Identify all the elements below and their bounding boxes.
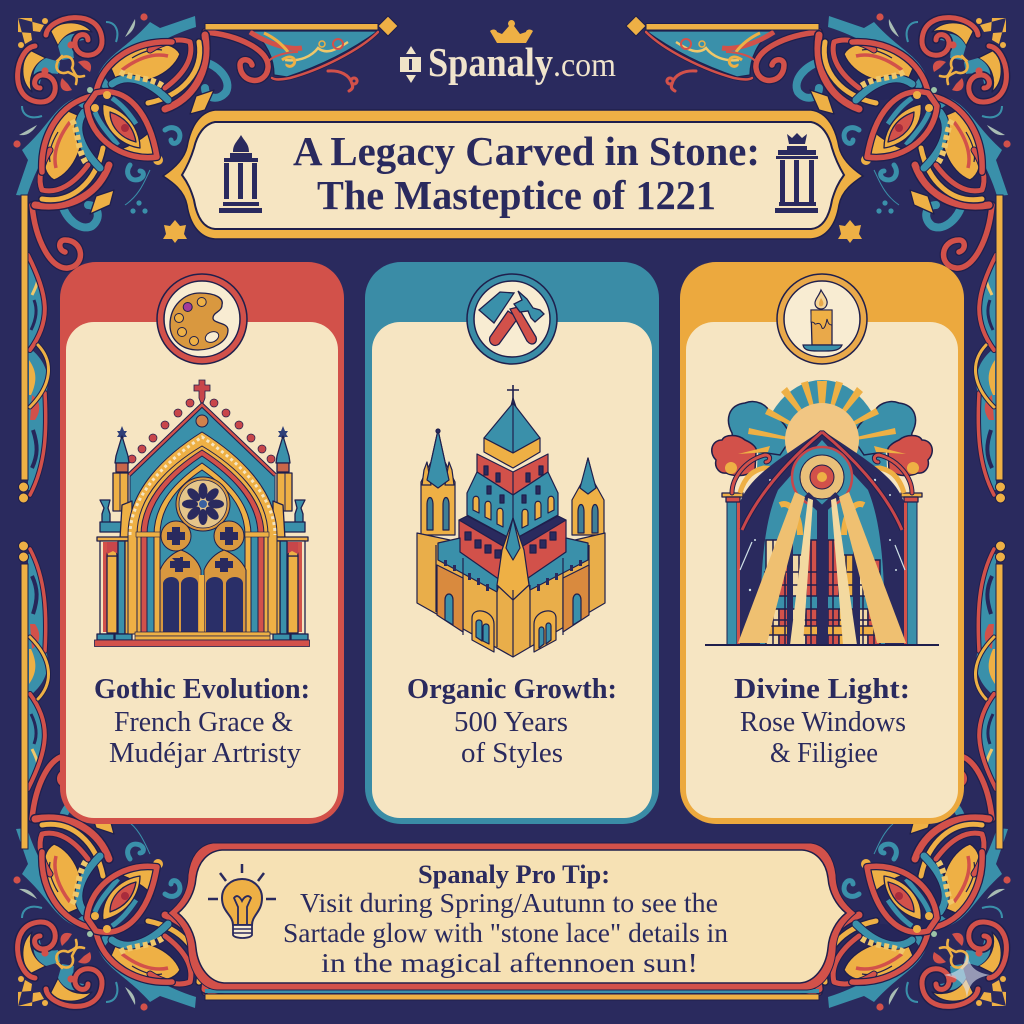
tip text: Visit during Spring/Autunn to see the bbox=[300, 888, 718, 918]
lower red tier bbox=[459, 520, 566, 590]
lancet windows bbox=[160, 550, 246, 634]
windows on red bbox=[465, 532, 556, 558]
logo bbox=[400, 20, 616, 85]
icon: left tower bbox=[219, 135, 262, 213]
lower roundels bbox=[161, 521, 244, 551]
panel text: Mudéjar Artristy bbox=[109, 738, 301, 769]
tip text: in the magical aftennoen sun! bbox=[321, 948, 698, 978]
tip text bbox=[283, 860, 729, 978]
top-left corner ornament bbox=[13, 13, 268, 268]
title banner bbox=[163, 110, 863, 239]
panel text bbox=[407, 673, 617, 769]
red tier bbox=[477, 454, 548, 495]
teal sun fan bbox=[757, 380, 887, 470]
top-right corner ornament bbox=[756, 13, 1011, 268]
rose bbox=[792, 447, 852, 507]
illustration: cathedral bbox=[417, 385, 605, 657]
left spire bbox=[421, 430, 455, 535]
panel text: of Styles bbox=[461, 738, 563, 769]
teal tier bbox=[467, 472, 558, 540]
illustration: rose window and sun bbox=[705, 380, 939, 646]
vertical wall lines bbox=[436, 545, 589, 647]
rose window bbox=[176, 477, 230, 531]
clouds and pillars left bbox=[712, 402, 790, 645]
wordmark: .com bbox=[553, 47, 616, 84]
panel text: Organic Growth: bbox=[407, 673, 617, 705]
panel text bbox=[94, 673, 310, 769]
top-left wing ornament bbox=[205, 16, 398, 91]
right spire bbox=[572, 458, 604, 535]
windows bbox=[484, 466, 543, 503]
central tower roof bbox=[484, 403, 540, 453]
pro tip banner bbox=[168, 843, 856, 990]
doors bbox=[445, 594, 581, 652]
panel text: & Filigiee bbox=[770, 738, 878, 769]
right upper strip bbox=[976, 195, 1006, 503]
left lower strip bbox=[18, 541, 48, 849]
walls bbox=[417, 533, 605, 657]
icon: logo mark bbox=[400, 46, 421, 83]
tip text: Spanaly Pro Tip: bbox=[418, 860, 610, 889]
illustration: gothic portal bbox=[94, 380, 310, 646]
heading: A Legacy Carved in Stone: bbox=[293, 128, 760, 174]
tip text: Sartade glow with "stone lace" details in bbox=[283, 918, 729, 948]
finial bbox=[194, 380, 210, 406]
icon: right tower with crown bbox=[775, 133, 818, 213]
decorative leaf right bbox=[838, 220, 862, 243]
ground line bbox=[705, 644, 939, 646]
side towers bbox=[97, 426, 132, 640]
concentric arches bbox=[128, 432, 277, 634]
icon: light bulb bbox=[208, 864, 276, 938]
gold tier bbox=[484, 438, 540, 468]
right lower strip bbox=[976, 541, 1006, 849]
light beams bbox=[738, 492, 805, 643]
panel text: French Grace & bbox=[114, 707, 293, 738]
icon: palette bbox=[157, 274, 247, 364]
lancet grids bbox=[764, 540, 882, 645]
panel text bbox=[734, 673, 910, 769]
teal lower roofs bbox=[438, 538, 500, 592]
bottom gold rule bbox=[205, 989, 819, 1000]
stained glass tracery bbox=[760, 440, 885, 645]
title banner: The Masteptice of 1221 bbox=[317, 172, 716, 218]
center mini spire bbox=[497, 518, 529, 600]
panel: Divine Light bbox=[680, 262, 964, 824]
panel: Gothic Evolution bbox=[60, 262, 344, 824]
icon: candle bbox=[777, 274, 867, 364]
decorative leaf left bbox=[163, 220, 187, 243]
cross and finial bbox=[507, 385, 519, 402]
panel: Organic Growth bbox=[365, 262, 659, 824]
icon: hammers bbox=[467, 274, 557, 364]
bottom-left corner ornament bbox=[13, 756, 268, 1011]
left upper strip bbox=[18, 195, 48, 503]
panel text: 500 Years bbox=[454, 707, 568, 738]
icon: crown bbox=[490, 20, 533, 43]
base bbox=[135, 632, 270, 636]
panel text: Gothic Evolution: bbox=[94, 673, 310, 705]
panel text: Rose Windows bbox=[740, 707, 906, 738]
navy interior bbox=[740, 430, 904, 645]
panel text: Divine Light: bbox=[734, 673, 910, 705]
clouds and pillars right bbox=[854, 402, 932, 645]
top-right wing ornament bbox=[626, 16, 819, 91]
bottom-right corner ornament bbox=[756, 756, 1011, 1011]
gable bbox=[130, 405, 275, 540]
central mullion bbox=[806, 495, 838, 510]
wordmark: Spanaly bbox=[428, 39, 553, 85]
sparkle watermark bbox=[944, 952, 990, 998]
